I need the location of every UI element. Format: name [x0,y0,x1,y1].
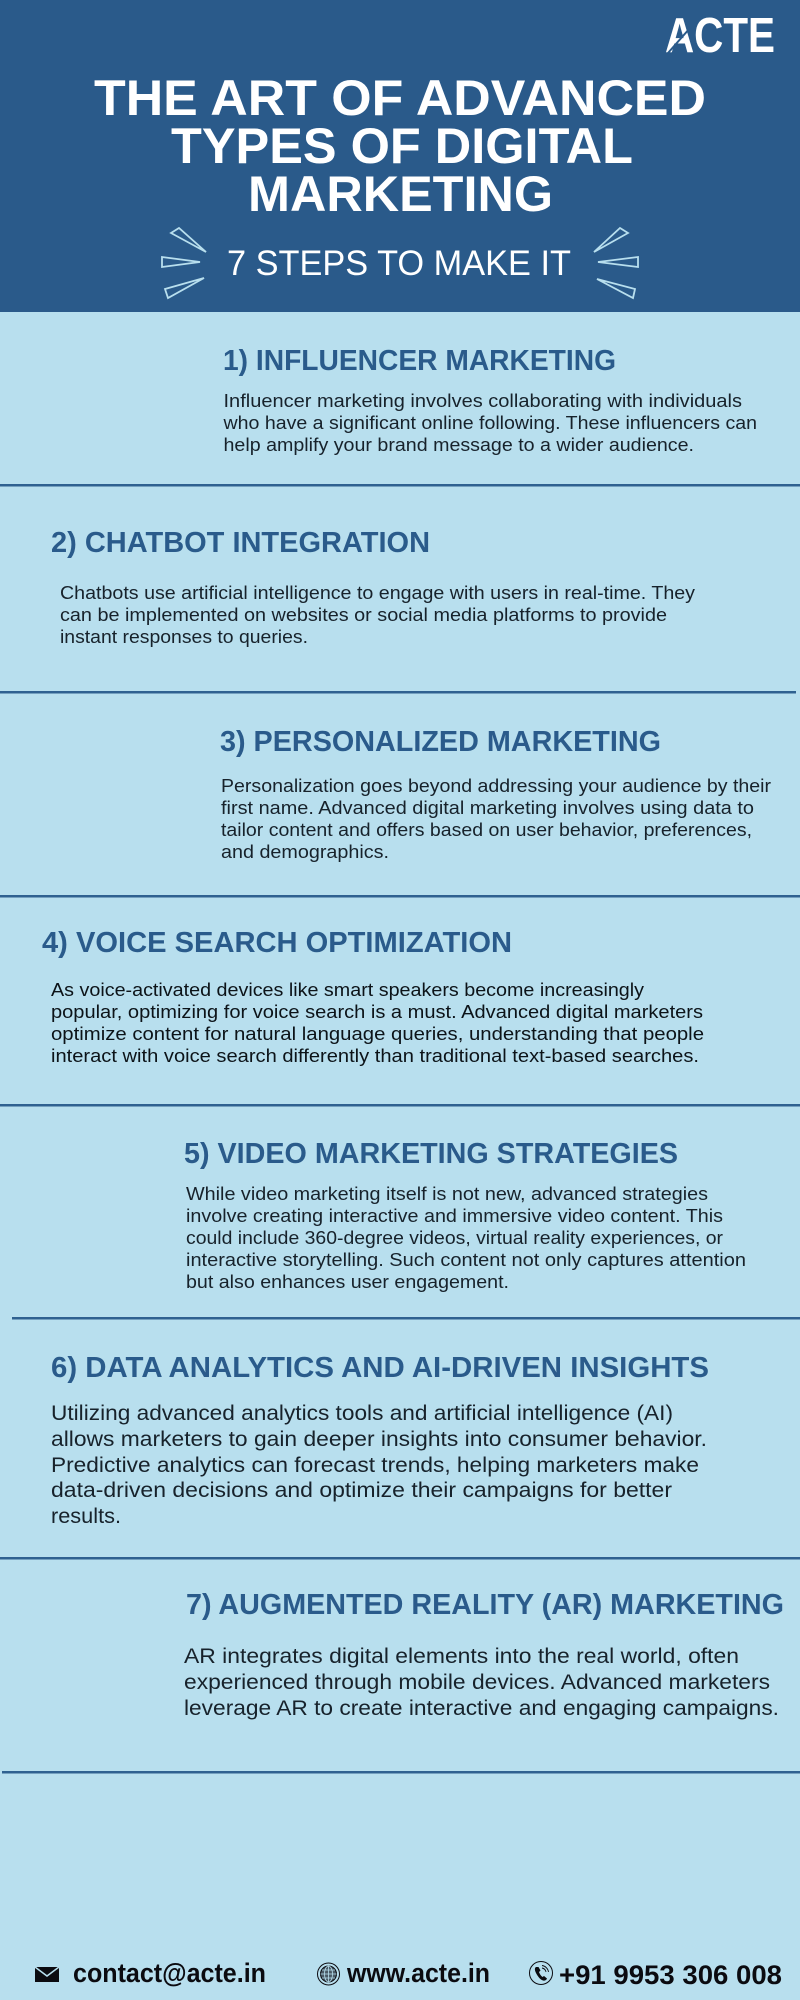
text: augmented reality [184,1644,779,1720]
text: chatbot integration: can be implemented on websites or social media platforms to provide [60,604,667,625]
footer: contact details [35,1958,782,1990]
text: data analytics: Predictive analytics can forecast trends, helping marketers make [51,1453,699,1477]
text: personalized marketing: and demographics. [221,841,389,862]
header band [0,0,800,312]
text: personalized marketing: first name. Advanced digital marketing involves using data to [221,797,754,818]
title: TYPES OF DIGITAL [171,118,633,174]
text: augmented reality: leverage AR to create interactive and engaging campaigns. [184,1696,779,1720]
text: influencer marketing: Influencer marketing involves collaborating with individuals [224,390,742,411]
title: THE ART OF ADVANCED [94,70,706,126]
text: chatbot integration: Chatbots use artificial intelligence to engage with users in real-time. They [60,582,696,603]
text: data analytics: data-driven decisions and optimize their campaigns for better [51,1478,672,1502]
text: influencer marketing: who have a significant online following. These influencers can [222,412,757,433]
contact email: contact@acte.in [73,1958,266,1988]
icon: mail [35,1967,59,1982]
heading: personalized marketing: 3) PERSONALIZED MARKETING [220,726,661,758]
text: augmented reality: experienced through mobile devices. Advanced marketers [184,1670,770,1694]
icon: phone [530,1962,552,1984]
title [94,70,706,222]
text: voice search optimization: popular, optimizing for voice search is a must. Advanced digital marketers [51,1001,703,1022]
heading: influencer marketing: 1) INFLUENCER MARKETING [223,345,616,377]
panel: personalized marketing [220,726,771,862]
phone number: +91 9953 306 008 [559,1960,782,1990]
heading: augmented reality: 7) AUGMENTED REALITY (AR) MARKETING [186,1589,784,1621]
panel: video marketing strategies [184,1138,746,1292]
text: video marketing strategies: but also enhances user engagement. [186,1271,509,1292]
text: chatbot integration [60,582,696,647]
text: video marketing strategies: interactive storytelling. Such content not only captures attention [186,1249,746,1270]
text: influencer marketing [222,390,757,455]
logo: ACTE: ACTE [665,9,775,63]
title: MARKETING [248,166,553,222]
text: voice search optimization: As voice-activated devices like smart speakers become increasingly [51,979,645,1000]
text: data analytics [51,1401,707,1528]
text: video marketing strategies: could include 360-degree videos, virtual reality experiences, or [186,1227,723,1248]
text: data analytics: results. [51,1504,121,1528]
text: influencer marketing: help amplify your brand message to a wider audience. [224,434,694,455]
text: video marketing strategies: involve creating interactive and immersive video content. This [186,1205,723,1226]
text: voice search optimization: optimize content for natural language queries, understanding that people [51,1023,704,1044]
text: personalized marketing [221,775,771,862]
panel: influencer marketing [222,345,757,455]
icon: right burst [594,228,638,298]
heading: data analytics: 6) DATA ANALYTICS AND AI-DRIVEN INSIGHTS [51,1352,709,1384]
heading: voice search optimization: 4) VOICE SEARCH OPTIMIZATION [42,927,512,959]
text: personalized marketing: tailor content and offers based on user behavior, preferences, [221,819,752,840]
text: personalized marketing: Personalization goes beyond addressing your audience by their [221,775,771,796]
panel: voice search optimization [42,927,704,1066]
panel: chatbot integration [51,527,696,647]
icon: globe [318,1963,340,1985]
text: data analytics: allows marketers to gain deeper insights into consumer behavior. [51,1427,707,1451]
heading: video marketing strategies: 5) VIDEO MARKETING STRATEGIES [184,1138,678,1170]
text: voice search optimization: interact with voice search differently than traditional text-based searches. [51,1045,699,1066]
text: voice search optimization [51,979,704,1066]
text: chatbot integration: instant responses to queries. [60,626,308,647]
panel: augmented reality marketing [184,1589,784,1720]
website: www.acte.in [346,1958,490,1988]
text: video marketing strategies [186,1183,746,1292]
text: video marketing strategies: While video marketing itself is not new, advanced strategies [186,1183,708,1204]
subtitle: 7 STEPS TO MAKE IT [227,244,571,283]
icon: left burst [162,228,206,298]
text: data analytics: Utilizing advanced analytics tools and artificial intelligence (AI) [51,1401,673,1425]
heading: chatbot integration: 2) CHATBOT INTEGRATION [51,527,430,559]
text: augmented reality: AR integrates digital elements into the real world, often [184,1644,739,1668]
panel: data analytics and AI-driven insights [51,1352,709,1528]
